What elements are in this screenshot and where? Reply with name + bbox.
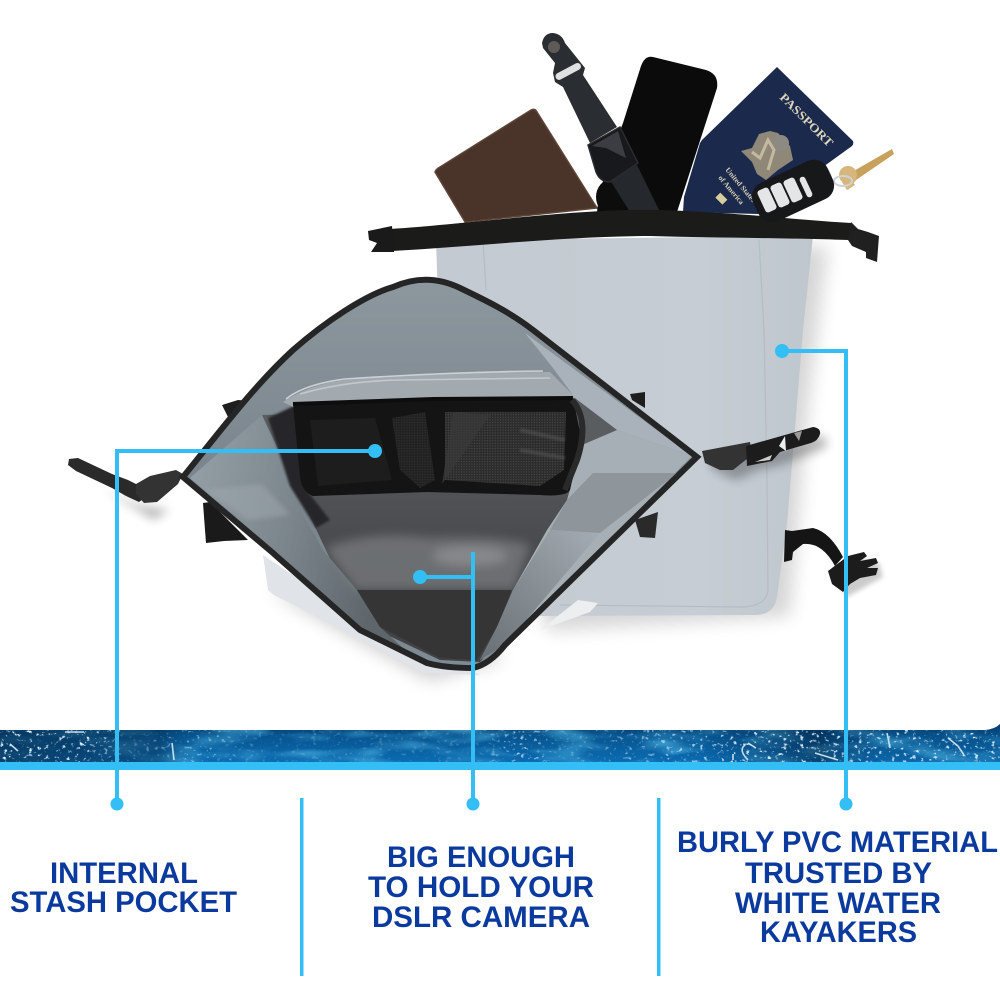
front panel of open bag bbox=[263, 555, 500, 680]
right inner flap bbox=[480, 430, 692, 660]
open bag interior bbox=[183, 280, 697, 668]
cyan rule under band bbox=[0, 762, 1000, 770]
passport country text: United States bbox=[723, 166, 758, 204]
smoky reflection bbox=[325, 536, 530, 590]
ocean band bbox=[0, 724, 1000, 762]
back dry bag bbox=[436, 236, 828, 631]
interior base bbox=[183, 280, 697, 668]
right lower white sliver bbox=[540, 600, 598, 630]
left strap buckle bbox=[368, 226, 394, 252]
text: burly PVC: BURLY PVC MATERIAL bbox=[677, 826, 998, 859]
weld highlight 1 bbox=[286, 371, 543, 399]
phone bbox=[597, 57, 717, 212]
callout: internal stash pocket bbox=[110, 444, 382, 810]
right flap darker panel bbox=[550, 473, 677, 533]
water glow texture bbox=[0, 730, 1000, 762]
text: big enough: DSLR CAMERA bbox=[372, 901, 590, 934]
inner right lip bbox=[525, 333, 692, 456]
left side strap stub behind open bag bbox=[222, 400, 262, 425]
text: burly PVC: TRUSTED BY bbox=[745, 857, 932, 890]
key fob and keys bbox=[747, 149, 894, 227]
right strap buckle bbox=[848, 222, 879, 262]
text: burly PVC bbox=[677, 826, 998, 949]
text: big enough: TO HOLD YOUR bbox=[368, 871, 594, 904]
dark left shade bbox=[268, 404, 330, 528]
passport country text line 2: of America bbox=[716, 174, 746, 206]
top closure strap bbox=[368, 210, 879, 262]
bottom dark panel bbox=[357, 590, 512, 660]
passport label: PASSPORT bbox=[777, 90, 836, 150]
text: burly PVC: WHITE WATER bbox=[735, 887, 941, 920]
right stub behind open bag bbox=[630, 392, 645, 408]
lower right clip behind open bag bbox=[635, 512, 658, 538]
wallet bbox=[435, 109, 597, 222]
text: big enough: BIG ENOUGH bbox=[387, 841, 575, 874]
rim binding bbox=[183, 280, 697, 668]
text: internal stash pocket bbox=[10, 857, 237, 919]
callout: DSLR capacity bbox=[413, 552, 480, 810]
text: big enough bbox=[368, 841, 594, 934]
right flap lower panel bbox=[480, 530, 600, 660]
foam texture bbox=[0, 730, 1000, 762]
left buckle on open bag bbox=[68, 458, 183, 520]
lower left clip behind open bag bbox=[203, 502, 248, 543]
divider left bbox=[300, 798, 304, 976]
text: burly PVC: KAYAKERS bbox=[760, 916, 917, 949]
passport eagle emblem bbox=[741, 131, 793, 180]
foam highlights bbox=[10, 732, 964, 760]
mesh pocket bbox=[293, 398, 582, 496]
weld band bbox=[283, 372, 576, 407]
smoke lighter patch bbox=[432, 546, 508, 566]
watch bbox=[542, 33, 660, 215]
weld highlight 2 bbox=[300, 378, 550, 394]
lower right strap and buckle bbox=[784, 528, 883, 597]
dark wedge right of pocket bbox=[575, 398, 617, 446]
text: internal stash pocket: INTERNAL bbox=[50, 857, 198, 890]
right side buckle on back bag bbox=[702, 427, 827, 480]
passport chip bbox=[715, 193, 727, 205]
passport bbox=[683, 67, 853, 214]
divider right bbox=[657, 798, 660, 976]
left inner flap bbox=[190, 415, 403, 648]
left flap crease bbox=[205, 484, 290, 520]
callout: PVC material bbox=[775, 344, 852, 810]
lower floor bbox=[262, 405, 620, 662]
text: internal stash pocket: STASH POCKET bbox=[10, 886, 237, 919]
